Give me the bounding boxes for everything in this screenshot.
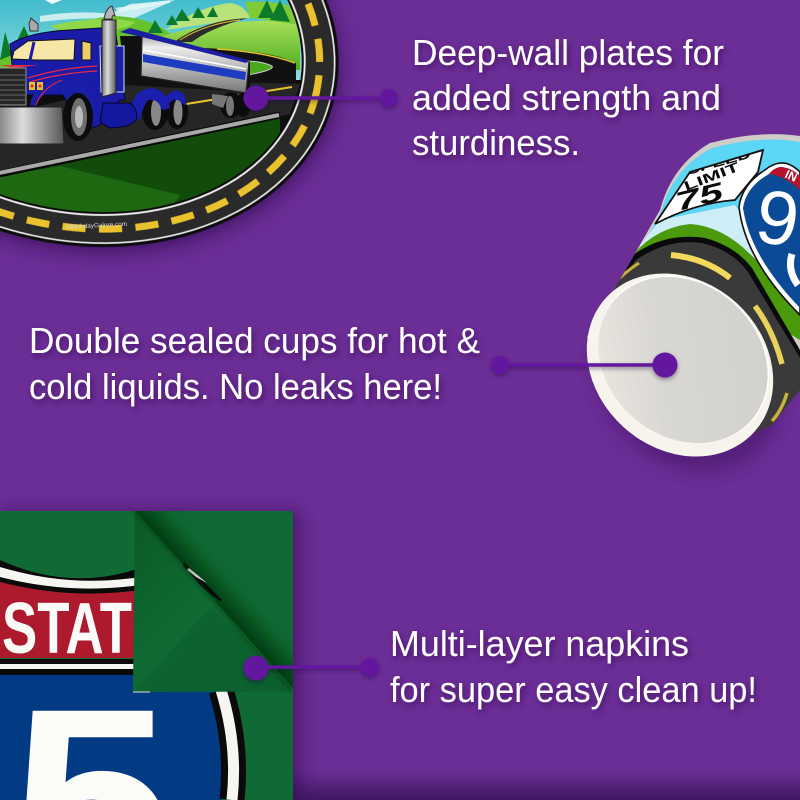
- napkin face: [0, 505, 296, 800]
- blue shield: [0, 675, 234, 800]
- rear wheels: [220, 92, 242, 118]
- interstate shield: [739, 163, 800, 315]
- cup base: [549, 236, 800, 494]
- exposed shield fragment: [182, 562, 222, 601]
- caption: plates: sturdiness.: [412, 122, 580, 163]
- speed limit sign: 75: [672, 176, 727, 217]
- caption: plates: [412, 32, 724, 163]
- caption: cups: [29, 320, 480, 407]
- interstate header: [0, 560, 140, 675]
- panel: paper cup: [586, 134, 800, 476]
- interstate shield: IN: [783, 167, 800, 185]
- panel: paper plate: [0, 0, 350, 262]
- front wheel: [63, 93, 93, 141]
- trailer chassis: [120, 36, 250, 92]
- tank: [141, 36, 249, 93]
- caption: napkins: Multi-layer napkins: [390, 623, 689, 664]
- cup body: [587, 134, 800, 434]
- exhaust stack: [102, 20, 116, 97]
- speed limit sign: LIMIT: [682, 159, 741, 194]
- cup shadow: [557, 251, 800, 509]
- napkin shadow: [0, 511, 300, 800]
- speed limit sign: SPEED: [685, 146, 752, 178]
- caption: cups: Double sealed cups for hot &: [29, 320, 480, 361]
- copyright: ©BirthdayGalore.com: [66, 220, 127, 231]
- panel: napkin: [0, 505, 300, 800]
- connector: napkins: [244, 656, 379, 680]
- fuel tank: [100, 103, 137, 128]
- caption: plates: added strength and: [412, 77, 721, 118]
- plate scene: [0, 0, 302, 212]
- caption: cups: cold liquids. No leaks here!: [29, 366, 442, 407]
- connector: plates: [244, 86, 398, 110]
- grille: [0, 68, 26, 105]
- truck: [0, 6, 251, 144]
- caption: plates: Deep-wall plates for: [412, 32, 724, 73]
- state text: STAT: [2, 589, 132, 669]
- cab: [10, 27, 125, 128]
- bumper: [0, 107, 64, 144]
- connector: cups: [491, 352, 678, 378]
- corner shading under fold: [135, 511, 293, 688]
- caption: napkins: [390, 623, 757, 710]
- speed limit sign: [655, 146, 763, 224]
- caption: napkins: for super easy clean up!: [390, 669, 757, 710]
- plate road rim: [0, 0, 378, 295]
- folded corner: [133, 511, 292, 692]
